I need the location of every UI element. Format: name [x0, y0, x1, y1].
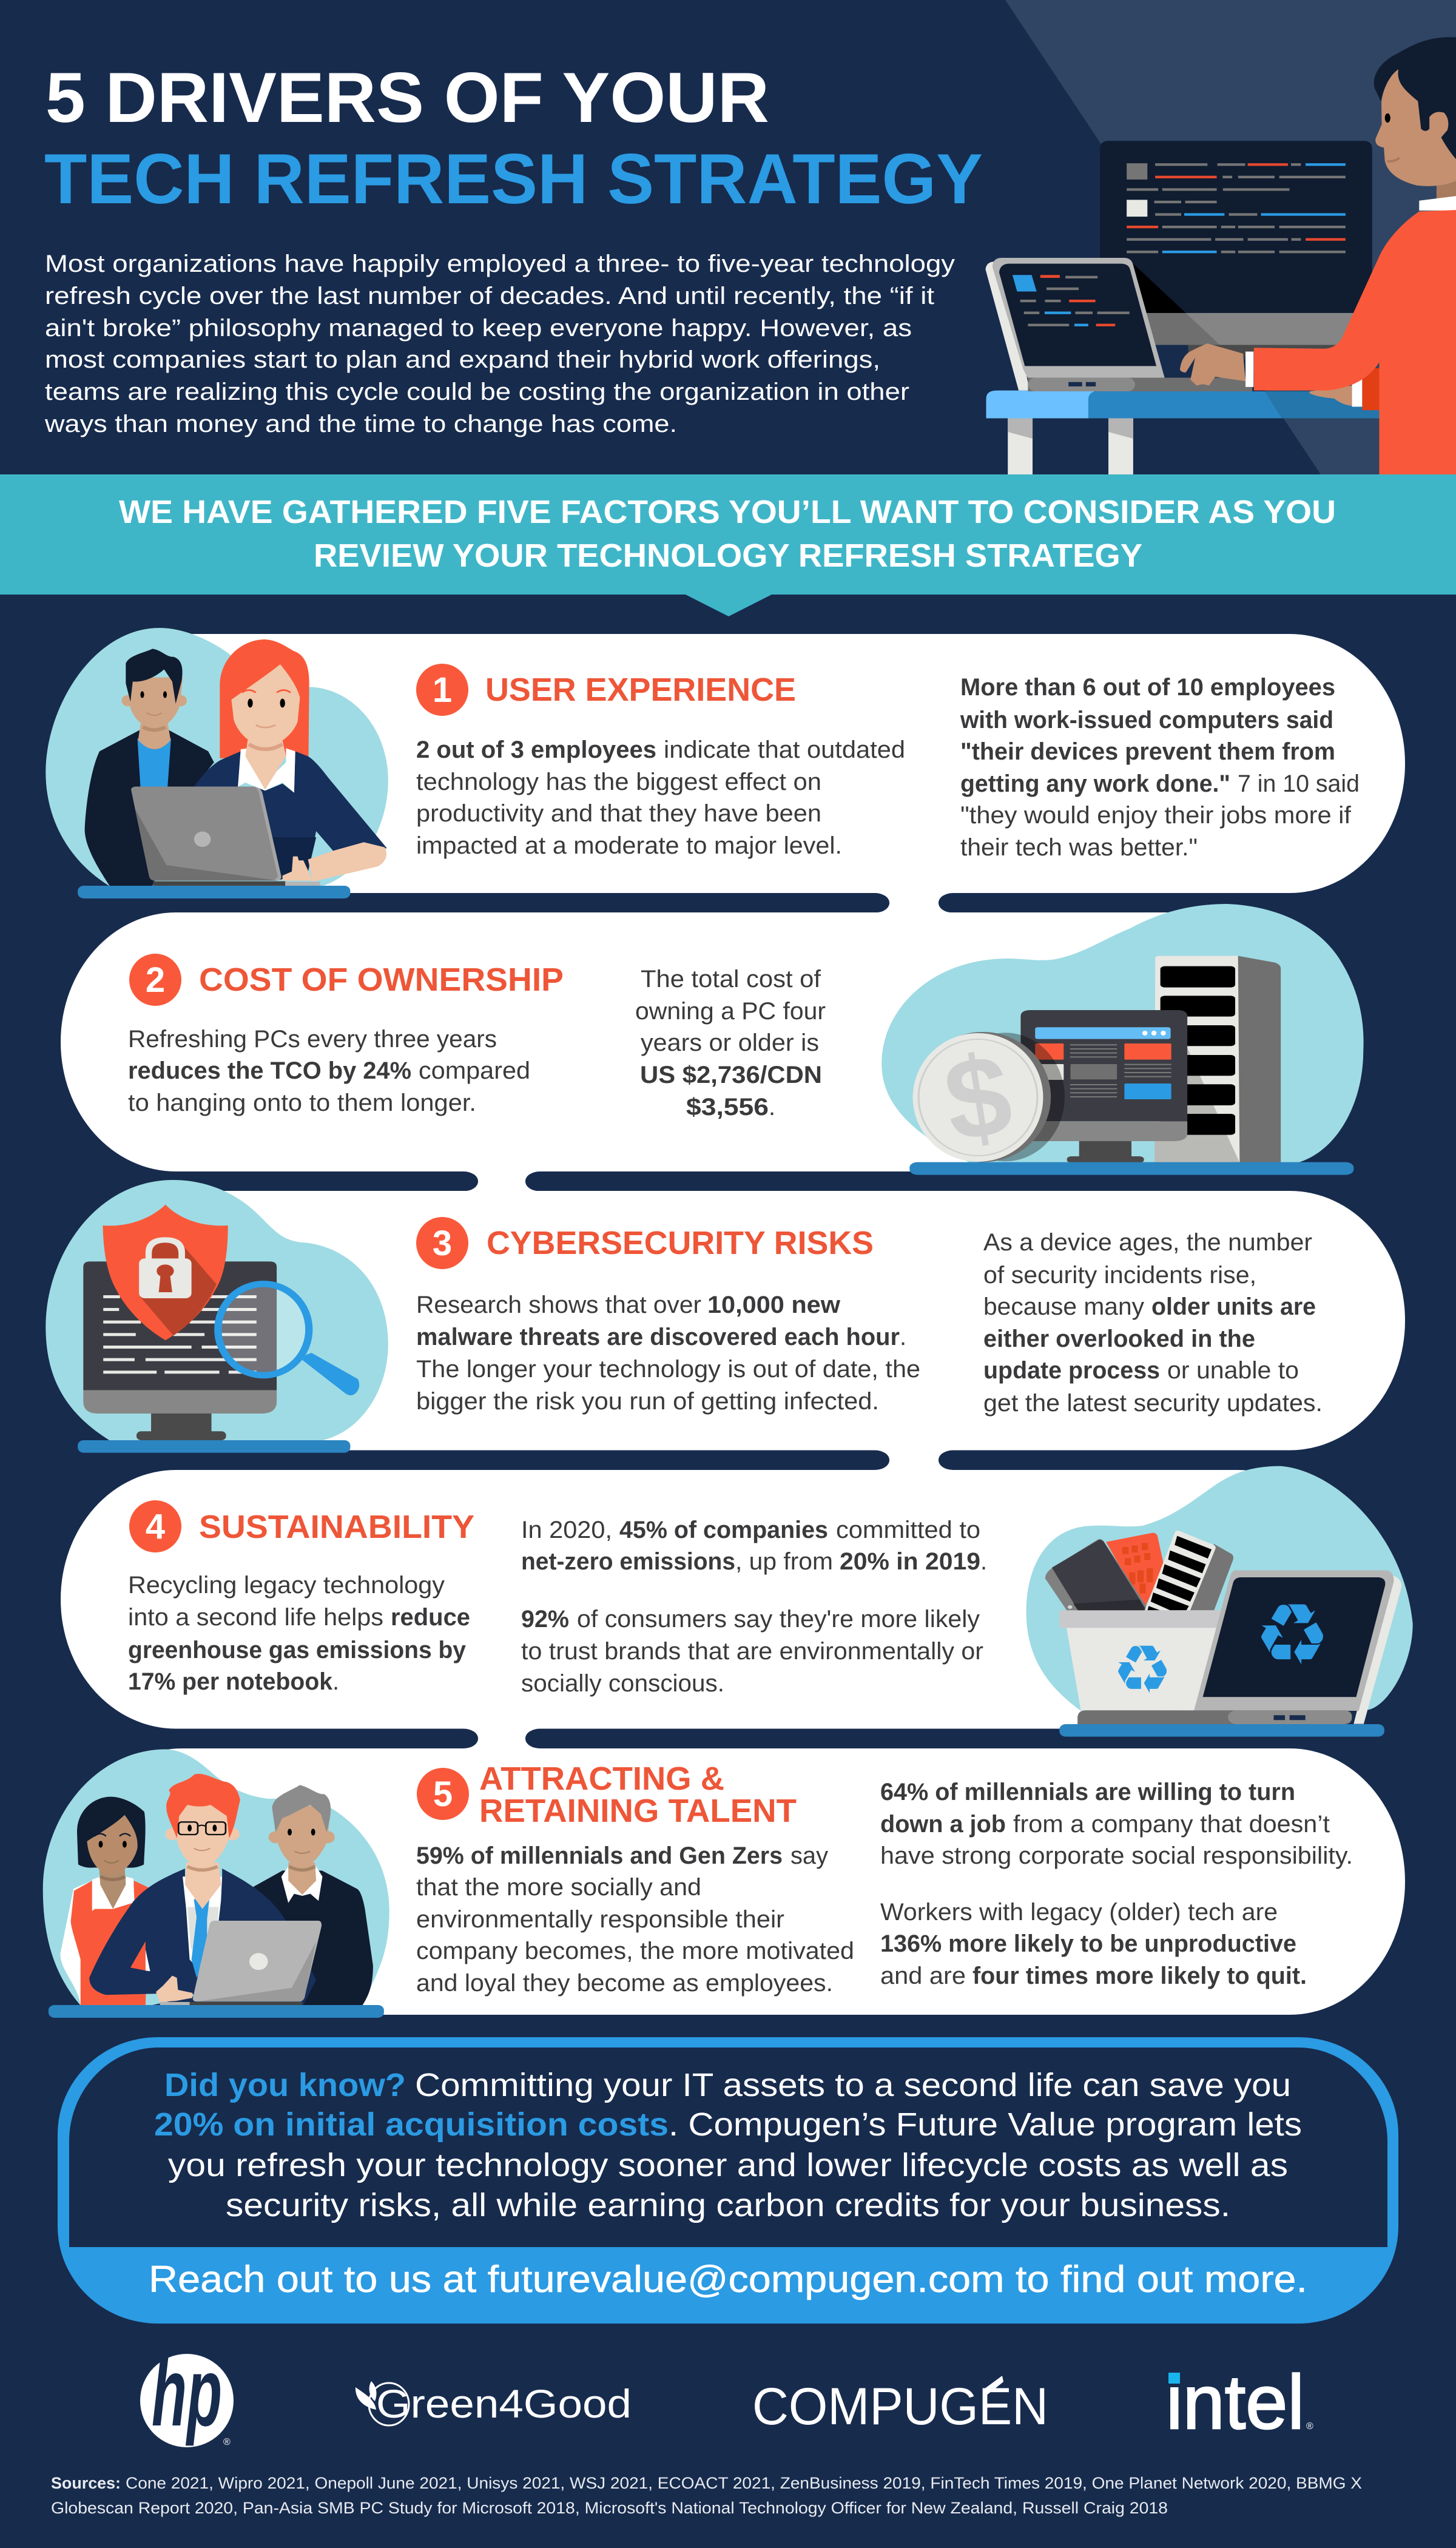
logos row [140, 2337, 1313, 2447]
number badge 4: 4 [146, 1507, 165, 1546]
text block: refreshing PCs: reduces the TCO by 24% [128, 1057, 411, 1084]
panel: cybersecurity risks [0, 1180, 1456, 1474]
logo: intel: intel [1166, 2359, 1304, 2445]
text block: employees: productivity and that they have been [416, 800, 821, 827]
text block: employees: technology has the biggest effect on [416, 769, 821, 795]
panel: sustainability [0, 1466, 1456, 1753]
icon: recycling bin and laptop: ♻ [1254, 1586, 1330, 1685]
text block: device age: As a device ages, the number [983, 1229, 1312, 1256]
heading: sustainability: SUSTAINABILITY [199, 1509, 474, 1545]
text block: millennials and legacy tech: and are [880, 1963, 966, 1989]
text block: net-zero and consumers: 92% [521, 1606, 569, 1633]
text block: malware: 10,000 new [707, 1292, 841, 1318]
text block: net-zero and consumers: net-zero emissions [521, 1548, 735, 1575]
text block: recycling: 17% per notebook [128, 1668, 333, 1695]
logo: hp [140, 2337, 234, 2447]
text block: net-zero and consumers: , up from [735, 1548, 833, 1575]
text block: work-issued computers [960, 674, 1360, 861]
intro text block: ways than money and the time to change has come. [44, 411, 677, 437]
text block: millennials and Gen Z: 59% of millennials and Gen Zers [416, 1842, 783, 1869]
text block: net-zero and consumers: socially conscious. [521, 1670, 724, 1697]
text block: device age: either overlooked in the [983, 1326, 1255, 1352]
icon: recycling bin and laptop [1026, 1466, 1413, 1737]
intro text block [44, 251, 955, 437]
title [44, 58, 983, 218]
logo: Compugen: COMPUGEN [752, 2378, 1048, 2436]
callout text: you refresh your technology sooner and lower lifecycle costs as well as [168, 2147, 1288, 2183]
text block: net-zero and consumers: In 2020, [521, 1517, 612, 1543]
callout text: security risks, all while earning carbon credits for your business. [226, 2187, 1230, 2223]
text block: malware [416, 1292, 920, 1415]
text block: millennials and Gen Z: that the more socially and [416, 1874, 701, 1901]
text block: device age: get the latest security updates. [983, 1390, 1323, 1417]
number badge 2: 2 [146, 960, 165, 1000]
panel: attracting and retaining talent [43, 1748, 1405, 2018]
logo: Green4Good: Green4Good [376, 2381, 632, 2426]
text block: millennials and legacy tech [880, 1779, 1353, 1989]
number badge 2 [129, 954, 181, 1006]
text block: millennials and legacy tech: down a job [880, 1811, 1006, 1838]
heading: user experience: USER EXPERIENCE [485, 672, 796, 708]
text block: work-issued computers: More than 6 out of 10 employees [960, 674, 1335, 701]
number badge 3: 3 [433, 1224, 452, 1263]
text block: refreshing PCs: Refreshing PCs every three years [128, 1026, 497, 1053]
text block: refreshing PCs [128, 1026, 530, 1116]
icon: server, monitor and coin [881, 904, 1364, 1175]
call to action: Reach out to us at futurevalue@compugen.com to find out more. [149, 2259, 1307, 2300]
text block: millennials and legacy tech: from a company that doesn’t [1013, 1811, 1330, 1838]
number badge 4 [129, 1500, 181, 1552]
text block: millennials and Gen Z: environmentally responsible their [416, 1906, 784, 1933]
text block: recycling: . [332, 1668, 339, 1695]
text block: refreshing PCs: to hanging onto to them longer. [128, 1090, 476, 1116]
text block: net-zero and consumers: . [980, 1548, 987, 1575]
text block: net-zero and consumers: committed to [836, 1517, 980, 1543]
callout text: Did you know? [164, 2067, 406, 2103]
text block: net-zero and consumers: 45% of companies [619, 1517, 828, 1543]
icon: two employees with laptop [46, 628, 388, 898]
banner heading: REVIEW YOUR TECHNOLOGY REFRESH STRATEGY [314, 538, 1142, 574]
callout text: Committing your IT assets to a second life can save you [415, 2067, 1291, 2103]
text block: total cost: The total cost of [641, 966, 821, 993]
text block: malware: bigger the risk you run of getting infected. [416, 1388, 879, 1415]
text block: work-issued computers: "they would enjoy their jobs more if [960, 802, 1352, 829]
text block: recycling: Recycling legacy technology [128, 1572, 445, 1599]
sources: Sources: [51, 2474, 121, 2492]
banner [0, 474, 1456, 616]
text block: work-issued computers: 7 in 10 said [1238, 770, 1360, 797]
text block: device age: or unable to [1167, 1357, 1299, 1384]
text block: employees [416, 736, 905, 859]
panel: did you know callout [58, 2037, 1398, 2324]
sources [51, 2474, 1362, 2517]
text block: net-zero and consumers: to trust brands that are environmentally or [521, 1638, 983, 1665]
heading: attracting and retaining talent: RETAINING TALENT [479, 1793, 797, 1829]
text block: work-issued computers: getting any work done." [960, 770, 1230, 797]
heading: attracting and retaining talent [479, 1761, 797, 1829]
title: 5 DRIVERS OF YOUR [46, 58, 769, 137]
heading: cybersecurity risks: CYBERSECURITY RISKS [487, 1225, 874, 1261]
text block: net-zero and consumers [521, 1517, 987, 1697]
text block: employees: 2 out of 3 employees [416, 736, 656, 763]
icon: server, monitor and coin: $ [936, 1030, 1020, 1167]
text block: work-issued computers: with work-issued computers said [960, 707, 1333, 733]
banner heading [119, 494, 1336, 574]
text block: device age: older units are [1151, 1293, 1316, 1320]
text block: malware: The longer your technology is out of date, the [416, 1356, 920, 1383]
title: TECH REFRESH STRATEGY [44, 139, 983, 218]
text block: total cost: years or older is [641, 1030, 819, 1056]
text block: work-issued computers: "their devices prevent them from [960, 738, 1335, 765]
text block: millennials and legacy tech: 136% more likely to be unproductive [880, 1930, 1296, 1957]
icon: shield, monitor and magnifier [46, 1180, 388, 1453]
text block: malware: Research shows that over [416, 1292, 701, 1318]
text block: net-zero and consumers: 20% in 2019 [840, 1548, 980, 1575]
intro text block: ain't broke” philosophy managed to keep everyone happy. However, as [45, 315, 912, 342]
number badge 1: 1 [433, 670, 452, 710]
heading: attracting and retaining talent: ATTRACTING & [479, 1761, 724, 1797]
text block: millennials and legacy tech: 64% of millennials are willing to turn [880, 1779, 1295, 1805]
panel: user experience [0, 628, 1456, 917]
text block: work-issued computers: their tech was better." [960, 834, 1198, 861]
sources: Cone 2021, Wipro 2021, Onepoll June 2021, Unisys 2021, WSJ 2021, ECOACT 2021, ZenBusiness 2019, FinTech Times 2019, One Planet Network 2020, BBMG X [126, 2474, 1362, 2492]
text block: millennials and legacy tech: four times more likely to quit. [972, 1963, 1307, 1989]
logo: hp: ® [223, 2437, 231, 2447]
icon: worker at desk with monitor and laptop [985, 37, 1456, 474]
banner heading: WE HAVE GATHERED FIVE FACTORS YOU’LL WANT TO CONSIDER AS YOU [119, 494, 1336, 530]
text block: device age: of security incidents rise, [983, 1262, 1256, 1289]
text block: total cost: owning a PC four [635, 998, 826, 1025]
text block: total cost: $3,556 [686, 1094, 769, 1121]
text block: total cost: . [769, 1094, 775, 1121]
text block: millennials and Gen Z: and loyal they become as employees. [416, 1970, 833, 1997]
panel: cost of ownership [0, 904, 1456, 1195]
text block: malware: malware threats are discovered each hour [416, 1324, 900, 1350]
text block: device age: update process [983, 1357, 1160, 1384]
intro text block: refresh cycle over the last number of decades. And until recently, the “if it [45, 283, 934, 309]
icon: recycling bin and laptop: ♻ [1113, 1631, 1172, 1708]
text block: millennials and legacy tech: Workers with legacy (older) tech are [880, 1899, 1278, 1926]
logo: intel: ® [1306, 2421, 1313, 2432]
callout text: . Compugen’s Future Value program lets [669, 2106, 1302, 2143]
callout text [154, 2067, 1302, 2223]
text block: employees: indicate that outdated [664, 736, 905, 763]
text block: employees: impacted at a moderate to major level. [416, 832, 842, 859]
text block: recycling: greenhouse gas emissions by [128, 1637, 467, 1663]
icon: three colleagues with laptop [43, 1749, 389, 2018]
text block: recycling: reduce [391, 1604, 470, 1631]
sources: Globescan Report 2020, Pan-Asia SMB PC Study for Microsoft 2018, Microsoft's National Technology Officer for New Zealand, Russell Craig 2018 [51, 2499, 1168, 2517]
text block: millennials and Gen Z: say [790, 1842, 828, 1869]
panel: header [44, 0, 1456, 474]
intro text block: teams are realizing this cycle could be costing the organization in other [45, 379, 909, 405]
text block: malware: . [900, 1324, 906, 1350]
number badge 5 [417, 1768, 469, 1820]
intro text block: Most organizations have happily employed a three- to five-year technology [45, 251, 955, 277]
number badge 3 [416, 1217, 468, 1269]
text block: recycling: into a second life helps [128, 1604, 383, 1631]
text block: device age: because many [983, 1293, 1144, 1320]
text block: millennials and Gen Z: company becomes, the more motivated [416, 1938, 854, 1964]
text block: millennials and legacy tech: have strong corporate social responsibility. [880, 1842, 1353, 1869]
number badge 1 [416, 664, 468, 716]
text block: millennials and Gen Z [416, 1842, 854, 1997]
logo: hp: hp [152, 2337, 222, 2446]
text block: recycling [128, 1572, 470, 1695]
heading: cost of ownership: COST OF OWNERSHIP [199, 962, 564, 998]
text block: total cost: US $2,736/CDN [640, 1062, 822, 1088]
intro text block: most companies start to plan and expand their hybrid work offerings, [45, 346, 880, 373]
text block: total cost [635, 966, 826, 1121]
text block: refreshing PCs: compared [419, 1057, 530, 1084]
text block: net-zero and consumers: of consumers say they're more likely [577, 1606, 980, 1633]
number badge 5: 5 [433, 1774, 453, 1814]
text block: device age [983, 1229, 1323, 1417]
callout text: 20% on initial acquisition costs [154, 2106, 669, 2143]
